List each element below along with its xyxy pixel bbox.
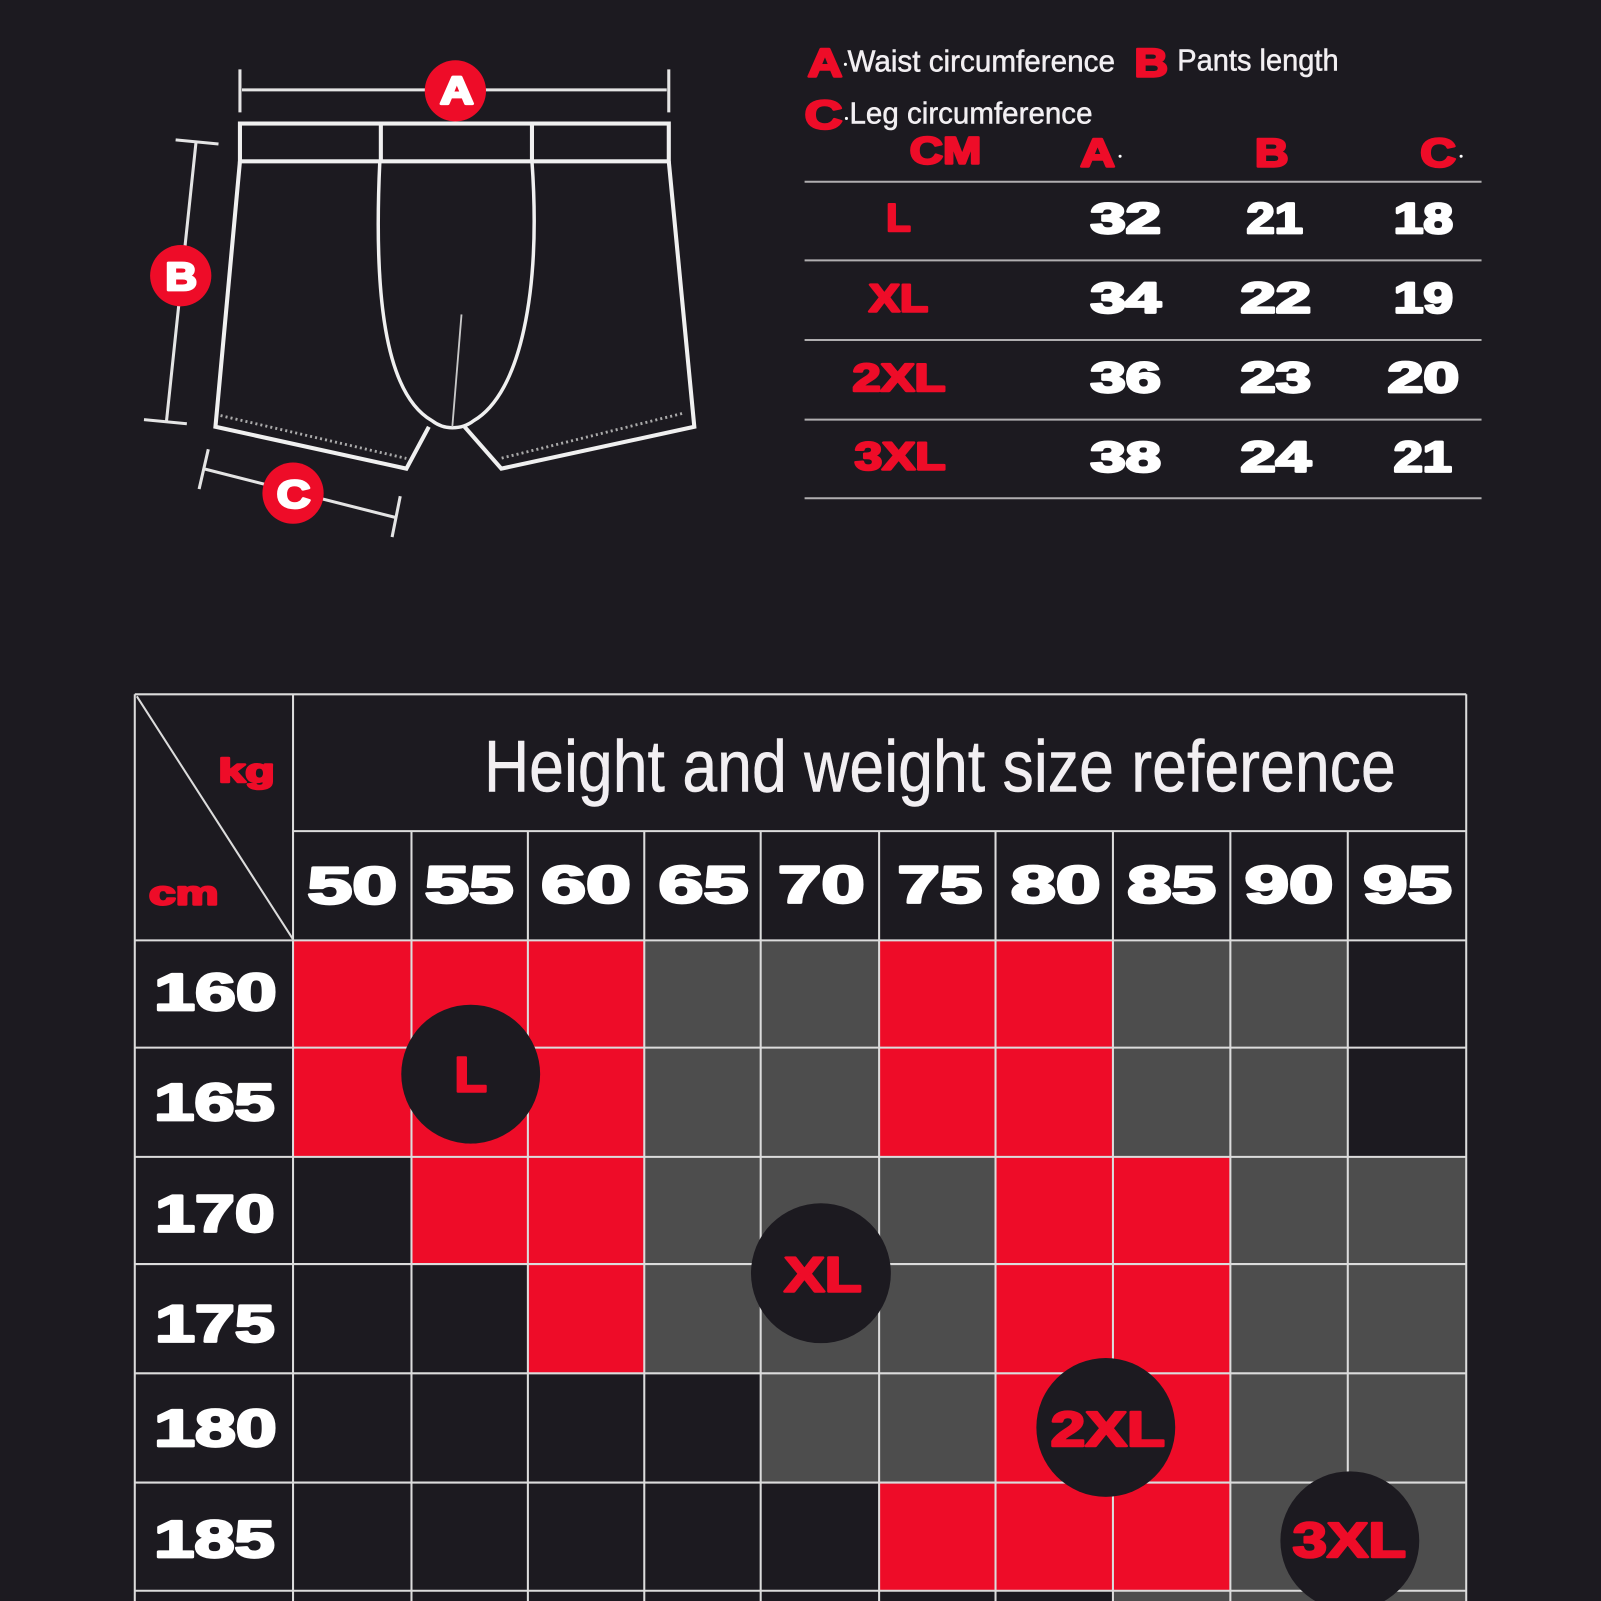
dimension C	[199, 449, 400, 537]
dimension B	[144, 140, 219, 424]
size badge: 2XL	[1036, 1358, 1175, 1497]
legend: waist circumference: A	[808, 42, 842, 86]
legend: leg circumference: C	[805, 94, 842, 138]
table row: XL: XL	[869, 277, 928, 320]
table row: 3XL: 24	[1241, 434, 1311, 482]
table header: CM	[910, 130, 981, 172]
table row: L	[886, 195, 1453, 243]
weight header row: 55	[425, 857, 514, 915]
size badge: XL	[751, 1203, 891, 1343]
legend: leg circumference: Leg circumference	[850, 97, 1093, 131]
legend: waist circumference: Waist circumference	[847, 44, 1115, 78]
size badge: L: L	[454, 1048, 487, 1102]
size badge: 3XL: 3XL	[1293, 1514, 1406, 1568]
size badge: 2XL: 2XL	[1051, 1403, 1165, 1457]
height label column	[154, 964, 277, 1569]
size badge: XL: XL	[784, 1249, 862, 1303]
table row: XL: 34	[1090, 274, 1161, 322]
table row: 2XL: 36	[1090, 354, 1161, 402]
dimension B: B	[165, 256, 197, 299]
weight header row: 95	[1363, 857, 1452, 915]
table rules	[805, 182, 1482, 498]
axis label: kg: kg	[219, 753, 275, 790]
table row: 3XL: 21	[1394, 434, 1452, 482]
weight header row	[307, 857, 1452, 916]
height label column: 170	[155, 1185, 275, 1243]
table row: L: 18	[1394, 195, 1453, 243]
height label column: 175	[155, 1296, 275, 1354]
table header	[910, 130, 1463, 175]
height label column: 160	[154, 964, 277, 1022]
table row: 2XL: 20	[1388, 354, 1459, 402]
table row: L: L	[886, 197, 911, 240]
weight header row: 50	[307, 858, 397, 916]
table row: XL: 22	[1241, 274, 1311, 322]
chart grid	[135, 694, 1466, 1601]
table row: XL: 19	[1394, 274, 1453, 322]
table header: A	[1080, 131, 1115, 175]
dimension A	[240, 60, 669, 122]
table row: XL	[869, 274, 1453, 322]
weight header row: 60	[541, 857, 631, 915]
height label column: 180	[154, 1400, 277, 1458]
weight header row: 90	[1245, 857, 1333, 915]
height and weight chart	[135, 694, 1466, 1601]
table row: 2XL: 23	[1241, 354, 1311, 402]
shorts outline	[215, 124, 694, 469]
table header: C	[1420, 131, 1456, 175]
size badge: 3XL	[1280, 1471, 1419, 1601]
weight header row: 65	[659, 857, 748, 915]
dimension C: C	[277, 473, 310, 516]
legend: waist circumference	[808, 42, 1115, 86]
dimension A: A	[440, 70, 474, 113]
weight header row: 85	[1127, 857, 1216, 915]
size badge: L	[401, 1005, 540, 1144]
chart cell fills	[293, 940, 1466, 1601]
legend: leg circumference	[805, 94, 1093, 138]
height label column: 165	[154, 1074, 275, 1132]
legend: pants length: B	[1134, 42, 1168, 86]
legend: pants length	[1134, 42, 1339, 86]
chart title: Height and weight size reference	[484, 724, 1396, 807]
weight header row: 80	[1011, 857, 1101, 915]
table row: 3XL	[855, 434, 1452, 482]
diagram: boxer shorts with measurements	[144, 60, 694, 537]
table row: L: 32	[1090, 195, 1161, 243]
table row: 3XL: 38	[1090, 434, 1161, 482]
table header: B	[1255, 131, 1289, 175]
height label column: 185	[154, 1511, 275, 1569]
weight header row: 70	[778, 857, 865, 915]
table row: 3XL: 3XL	[855, 436, 945, 479]
axis label: cm: cm	[149, 876, 219, 913]
weight header row: 75	[897, 857, 982, 915]
size table	[805, 130, 1482, 498]
legend	[805, 42, 1339, 138]
table row: 2XL	[853, 354, 1459, 402]
table row: 2XL: 2XL	[853, 357, 945, 400]
table row: L: 21	[1247, 195, 1303, 243]
legend: pants length: Pants length	[1177, 43, 1339, 77]
